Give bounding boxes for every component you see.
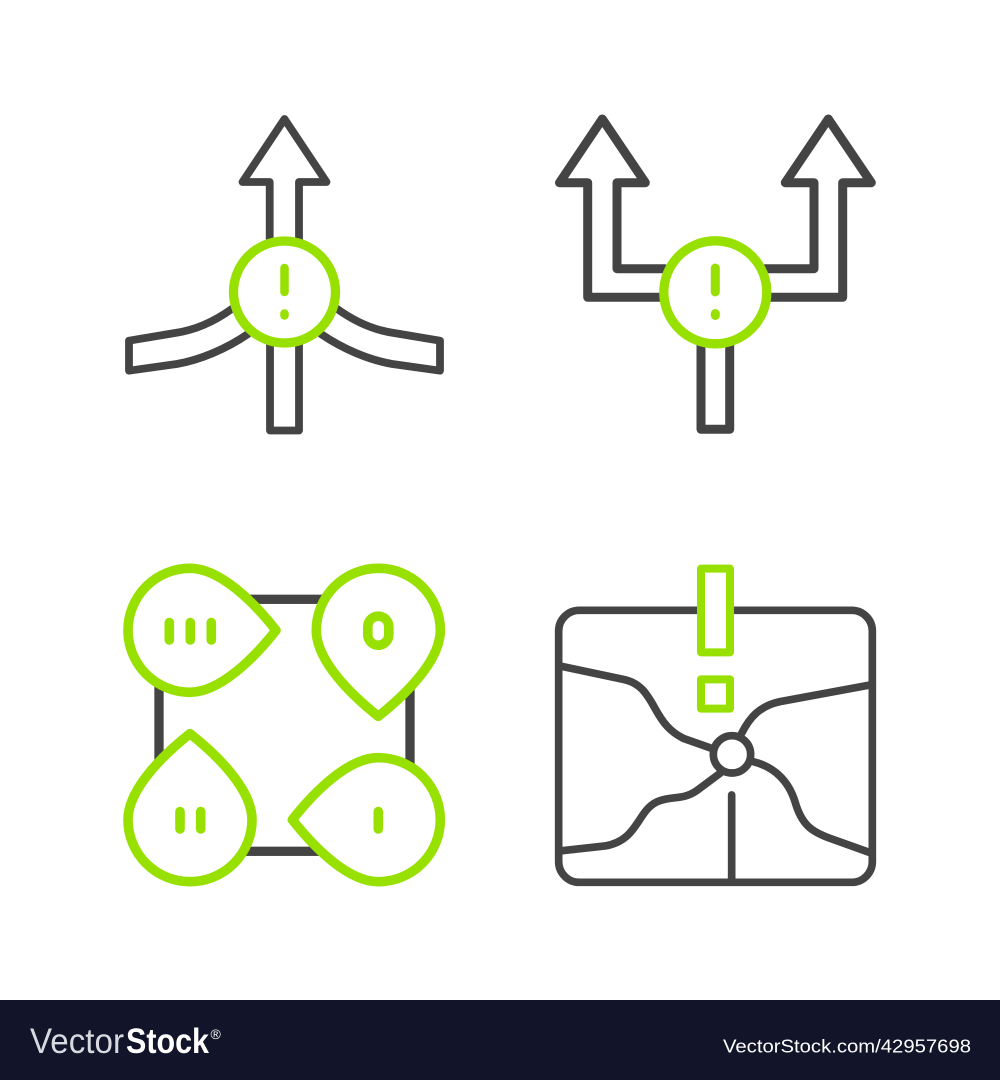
image id text: VectorStock.com/42957698: [723, 1037, 971, 1057]
logo: VectorStock: Stock: [126, 1022, 209, 1061]
icon: split arrows with warning: [560, 119, 871, 429]
logo: VectorStock: ®: [210, 1026, 222, 1042]
logo: VectorStock: Vector: [30, 1022, 124, 1061]
icon: road map with warning mark: [559, 569, 872, 882]
footer bar: [0, 1000, 1000, 1080]
icon: three-way merging arrow with warning: [129, 119, 440, 430]
logo: VectorStock: [30, 1022, 222, 1061]
icon: square route with four numbered map pins: [128, 568, 440, 882]
